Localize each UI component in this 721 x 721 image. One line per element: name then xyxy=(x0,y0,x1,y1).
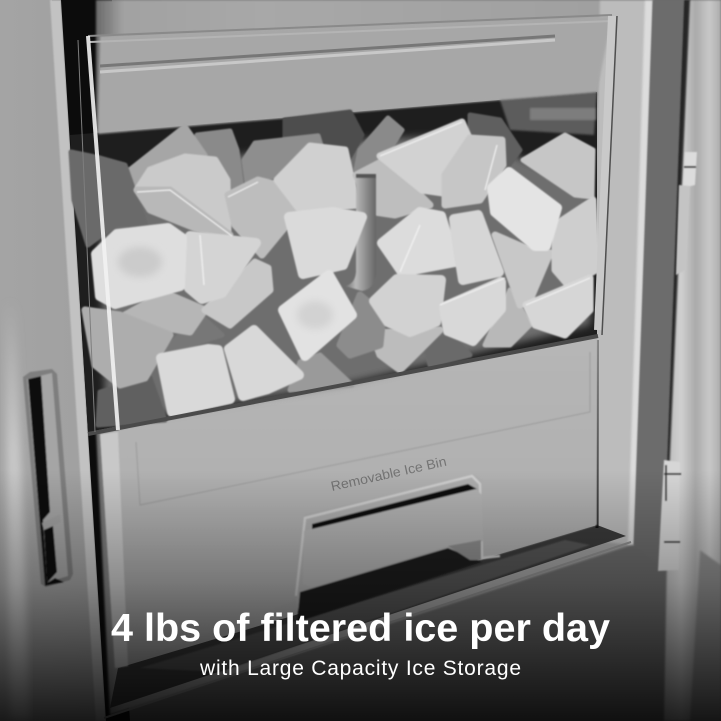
right door gap xyxy=(634,0,691,570)
ice bin front panel xyxy=(100,336,598,672)
upper clear bin wall xyxy=(98,16,612,135)
black channel beside bin xyxy=(61,0,130,721)
clear bin rim and highlights xyxy=(78,15,617,434)
bottom dark gradient overlay xyxy=(0,470,721,721)
ice pile shadow filler xyxy=(100,135,590,415)
bin interior dark background xyxy=(70,92,597,432)
ice centre shading xyxy=(118,247,333,329)
bin handle xyxy=(296,474,500,622)
ice cubes: front layer xyxy=(96,172,557,412)
right fridge door xyxy=(664,0,721,721)
caption xyxy=(111,607,610,680)
heading: 4 lbs of filtered ice per day xyxy=(111,607,610,650)
back wall and right panel xyxy=(96,0,653,715)
left freezer door xyxy=(0,0,106,721)
recess floor under bin xyxy=(104,340,631,718)
ice cubes: back layer xyxy=(71,112,593,425)
ice highlights xyxy=(137,122,590,305)
embossed label: Removable Ice Bin: Removable Ice Bin xyxy=(329,454,448,494)
subheading: with Large Capacity Ice Storage xyxy=(199,657,521,680)
hinges xyxy=(658,152,697,571)
ice cubes: middle layer xyxy=(85,122,596,385)
metal ice pipe xyxy=(345,174,376,291)
door handle slot xyxy=(23,369,73,587)
